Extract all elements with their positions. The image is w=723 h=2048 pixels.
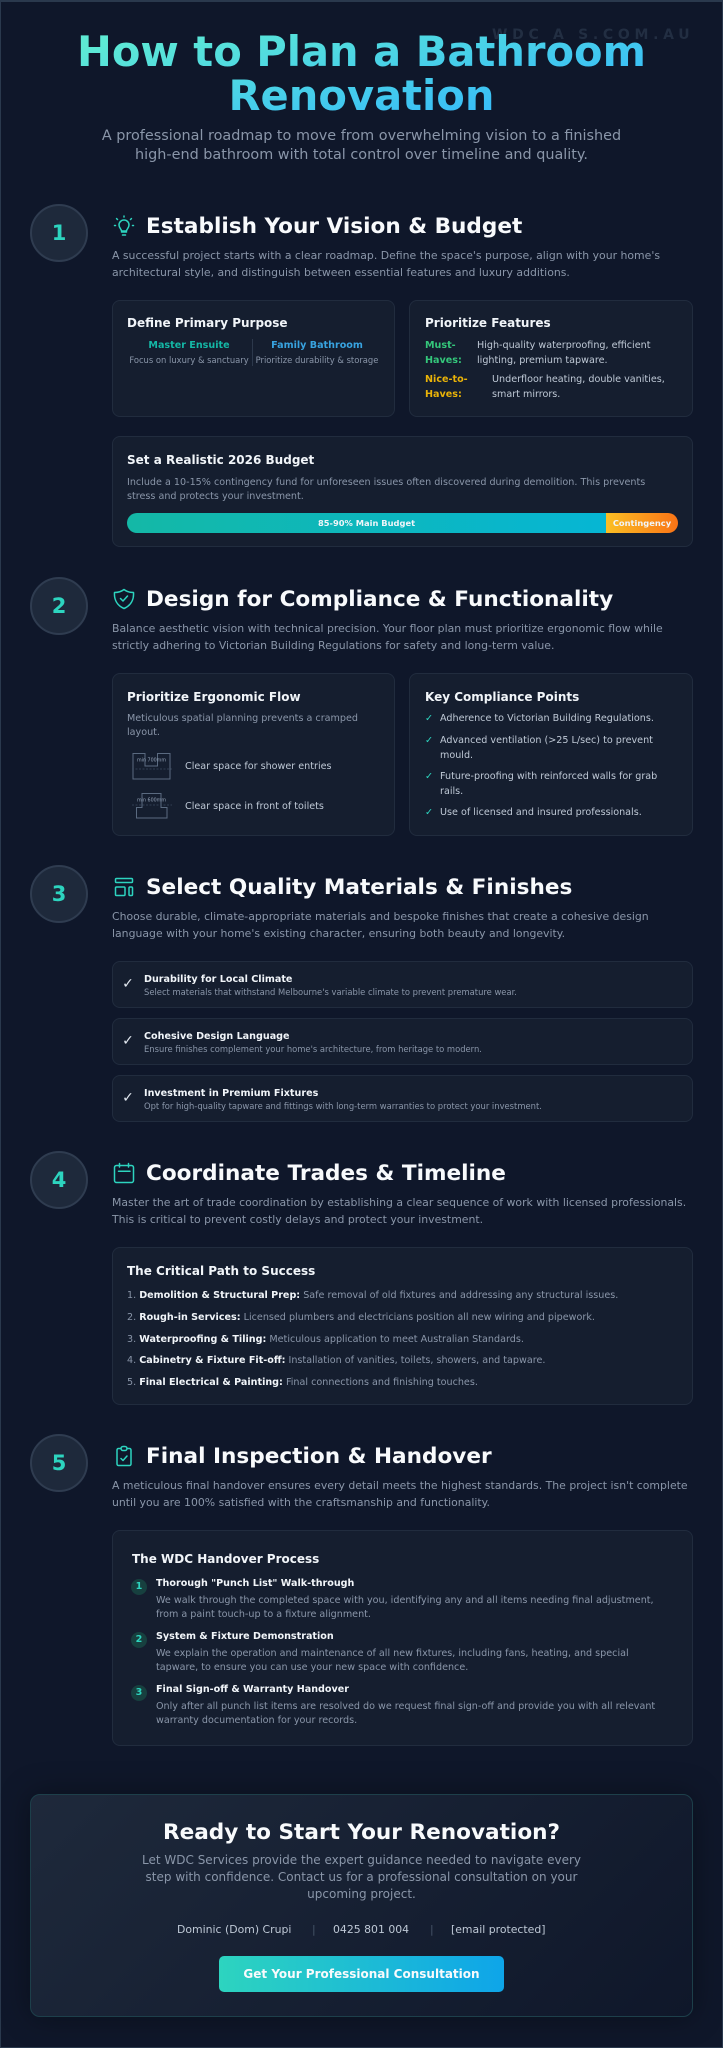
compliance item 2 <box>425 735 653 761</box>
button <box>219 1956 504 1992</box>
subtitle <box>102 128 621 163</box>
step number 3: 3 <box>52 882 66 906</box>
path step 1: 1. Demolition & Structural Prep: Safe removal of old fixtures and addressing any structural issues. <box>127 1290 618 1301</box>
must-haves <box>425 340 650 366</box>
badge: 2 <box>136 1634 142 1644</box>
panel heading: Prioritize Ergonomic Flow <box>127 690 301 704</box>
watermark: WDC A S.COM.AU <box>492 27 694 43</box>
icon: shield <box>114 588 134 610</box>
description: until you are 100% satisfied with the craftsmanship and functionality. <box>112 1496 490 1508</box>
step number 5 <box>30 1434 88 1492</box>
panel: budget <box>112 436 693 547</box>
check icon: ✓ <box>122 1033 134 1049</box>
item title: Durability for Local Climate <box>144 974 292 984</box>
compliance item 1: ✓ <box>425 713 433 724</box>
subtitle: high-end bathroom with total control over timeline and quality. <box>135 147 588 163</box>
heading: Establish Your Vision & Budget <box>146 214 522 238</box>
item text: Ensure finishes complement your home's architecture, from heritage to modern. <box>144 1044 482 1054</box>
main budget segment: 85-90% Main Budget <box>318 518 415 528</box>
icon: layout <box>114 878 134 896</box>
panel heading: The WDC Handover Process <box>132 1552 319 1566</box>
step number 1: 1 <box>52 221 66 245</box>
panel: key compliance points <box>409 673 693 836</box>
step text: We walk through the completed space with you, identifying any and all items needing final adjustment, <box>156 1595 654 1606</box>
label: toilet: Clear space in front of toilets <box>185 800 324 812</box>
heading: Select Quality Materials & Finishes <box>146 875 572 900</box>
step number 5: 5 <box>52 1451 66 1475</box>
path step 4: 4. Cabinetry & Fixture Fit-off: Installation of vanities, toilets, showers, and tapware. <box>127 1355 545 1366</box>
panel text <box>127 713 358 738</box>
panel: premium fixtures <box>112 1075 693 1122</box>
badge <box>131 1632 147 1648</box>
description: architectural style, and distinguish between essential features and luxury additions. <box>112 266 570 278</box>
step text <box>156 1648 629 1673</box>
contact name: Dominic (Dom) Crupi <box>177 1923 291 1936</box>
contact details: | <box>312 1923 316 1936</box>
step text <box>156 1595 654 1620</box>
section 4: trades <box>30 1151 693 1405</box>
step text: warranty documentation for your records. <box>156 1715 357 1726</box>
handover step 3 <box>131 1684 655 1726</box>
icon: shower clearance diagram <box>132 753 172 780</box>
contact phone: 0425 801 004 <box>333 1923 409 1936</box>
item text: Select materials that withstand Melbourne's variable climate to prevent premature wear. <box>144 987 517 997</box>
icon: lightbulb <box>114 215 134 236</box>
path step 2: 2. Rough-in Services: Licensed plumbers and electricians position all new wiring and pipework. <box>127 1312 595 1323</box>
nice-to-haves: smart mirrors. <box>492 389 560 400</box>
contingency segment <box>606 513 678 533</box>
step text: We explain the operation and maintenance of all new fixtures, including fans, heating, and special <box>156 1648 629 1659</box>
nice-to-haves: Nice-to- <box>425 374 468 385</box>
description: language with your home's existing character, ensuring both beauty and longevity. <box>112 927 565 940</box>
heading: Design for Compliance & Functionality <box>146 586 613 612</box>
panel heading: Key Compliance Points <box>425 690 579 704</box>
label: shower: Clear space for shower entries <box>185 760 332 772</box>
step number 2: 2 <box>52 594 66 618</box>
panel text: layout. <box>127 727 160 738</box>
step number 3 <box>30 865 88 923</box>
compliance item 4: Use of licensed and insured professionals. <box>440 807 642 818</box>
compliance item 2: ✓ <box>425 735 433 746</box>
budget text <box>127 476 645 502</box>
description <box>112 622 663 652</box>
step title: Final Sign-off & Warranty Handover <box>156 1684 349 1695</box>
must-haves: High-quality waterproofing, efficient <box>477 340 650 351</box>
panel heading: Prioritize Features <box>425 316 551 330</box>
contact details <box>177 1922 547 1938</box>
nice-to-haves <box>425 374 665 400</box>
description: strictly adhering to Victorian Building Regulations for safety and long-term value. <box>112 638 554 652</box>
step text: Only after all punch list items are resolved do we request final sign-off and provide you with all relevant <box>156 1701 655 1712</box>
option: family bathroom: Prioritize durability & storage <box>256 355 378 365</box>
budget text: Include a 10-15% contingency fund for unforeseen issues often discovered during demolition. This prevents <box>127 476 645 488</box>
description: Master the art of trade coordination by establishing a clear sequence of work with licensed professionals. <box>112 1196 686 1208</box>
option: master ensuite: Master Ensuite <box>148 340 230 351</box>
cta heading: Ready to Start Your Renovation? <box>163 1820 560 1844</box>
compliance item 1: Adherence to Victorian Building Regulations. <box>440 713 654 724</box>
item title: Cohesive Design Language <box>144 1030 290 1042</box>
compliance item 2: Advanced ventilation (>25 L/sec) to prevent <box>440 735 653 746</box>
option: family bathroom <box>256 340 378 365</box>
description: A meticulous final handover ensures every detail meets the highest standards. The project isn't complete <box>112 1478 688 1492</box>
panel heading: The Critical Path to Success <box>127 1264 315 1278</box>
compliance item 4: ✓ <box>425 807 433 818</box>
panel: handover process <box>112 1530 693 1746</box>
item text: Opt for high-quality tapware and fittings with long-term warranties to protect your investment. <box>144 1101 542 1111</box>
section 2: compliance <box>30 577 693 836</box>
step text: tapware, to ensure you can use your new space with confidence. <box>156 1662 468 1673</box>
description: This is critical to prevent costly delays and protect your investment. <box>112 1212 483 1226</box>
title: How to Plan a Bathroom <box>77 27 646 76</box>
description: A successful project starts with a clear roadmap. Define the space's purpose, align with your home's <box>112 248 660 262</box>
icon: clipboard check <box>116 1446 132 1466</box>
compliance item 3: rails. <box>440 786 463 797</box>
description: Balance aesthetic vision with technical precision. Your floor plan must prioritize ergonomic flow while <box>112 622 663 634</box>
main budget segment <box>127 513 606 533</box>
option: family bathroom: Family Bathroom <box>271 340 363 351</box>
handover step 2 <box>131 1631 629 1673</box>
description <box>112 910 649 940</box>
icon: calendar <box>114 1162 134 1184</box>
heading: Coordinate Trades & Timeline <box>146 1160 506 1186</box>
step number 4 <box>30 1151 88 1209</box>
step text: from a paint touch-up to a fixture alignment. <box>156 1609 371 1620</box>
panel: ergonomic flow <box>112 673 395 836</box>
panel heading: Set a Realistic 2026 Budget <box>127 452 314 466</box>
icon: shower clearance diagram: min 700mm <box>137 758 166 764</box>
step number 1 <box>30 204 88 262</box>
nice-to-haves: Underfloor heating, double vanities, <box>492 374 665 385</box>
icon: toilet clearance diagram: min 600mm <box>137 798 166 804</box>
cta text: Let WDC Services provide the expert guidance needed to navigate every <box>142 1852 581 1866</box>
section 5: handover <box>30 1434 693 1746</box>
subtitle: A professional roadmap to move from overwhelming vision to a finished <box>102 128 621 144</box>
panel: define primary purpose <box>112 300 395 417</box>
description <box>112 1478 688 1508</box>
budget text: stress and protects your investment. <box>127 491 304 502</box>
item title: Investment in Premium Fixtures <box>144 1088 318 1098</box>
panel heading: Define Primary Purpose <box>127 316 288 330</box>
compliance item 3: ✓ <box>425 771 433 782</box>
check icon: ✓ <box>122 976 134 992</box>
cta text: upcoming project. <box>307 1886 416 1900</box>
badge <box>131 1684 147 1700</box>
must-haves: Haves: <box>425 355 462 366</box>
must-haves: lighting, premium tapware. <box>477 355 608 366</box>
badge: 3 <box>136 1686 142 1698</box>
panel: critical path <box>112 1247 693 1405</box>
step number 2 <box>30 577 88 635</box>
title <box>30 30 693 118</box>
description <box>112 248 660 278</box>
contingency segment: Contingency <box>613 518 671 528</box>
must-haves: Must- <box>425 340 456 351</box>
step number 4: 4 <box>52 1168 66 1192</box>
panel text: Meticulous spatial planning prevents a cramped <box>127 713 358 724</box>
button: Get Your Professional Consultation <box>243 1967 480 1981</box>
section 1: vision and budget <box>30 204 693 547</box>
panel: cohesive design <box>112 1018 693 1065</box>
option: master ensuite <box>129 340 249 365</box>
description <box>112 1196 686 1226</box>
cta text: step with confidence. Contact us for a professional consultation on your <box>146 1870 577 1884</box>
step title: System & Fixture Demonstration <box>156 1631 334 1642</box>
description: Choose durable, climate-appropriate materials and bespoke finishes that create a cohesive design <box>112 910 649 923</box>
contact details: | <box>430 1923 434 1936</box>
panel: call to action <box>30 1794 693 2017</box>
compliance item 2: mould. <box>440 750 473 761</box>
cta text <box>31 1852 692 1902</box>
compliance item 3 <box>425 771 657 797</box>
badge: 1 <box>136 1580 142 1592</box>
step title: Thorough "Punch List" Walk-through <box>156 1578 354 1589</box>
title: Renovation <box>229 71 494 120</box>
step text <box>156 1701 655 1726</box>
section 3: materials <box>30 865 693 1122</box>
heading: Final Inspection & Handover <box>146 1444 492 1468</box>
compliance item 3: Future-proofing with reinforced walls for grab <box>440 771 657 782</box>
budget bar <box>127 513 678 533</box>
icon: toilet clearance diagram <box>132 793 172 818</box>
panel: durability <box>112 961 693 1008</box>
check icon: ✓ <box>122 1090 134 1106</box>
panel: prioritize features <box>409 300 693 417</box>
handover step 1 <box>131 1578 654 1620</box>
contact email: [email protected] <box>451 1923 546 1936</box>
path step 5: 5. Final Electrical & Painting: Final connections and finishing touches. <box>127 1377 478 1388</box>
option: master ensuite: Focus on luxury & sanctuary <box>129 355 249 365</box>
badge <box>131 1578 147 1594</box>
nice-to-haves: Haves: <box>425 389 462 400</box>
path step 3: 3. Waterproofing & Tiling: Meticulous application to meet Australian Standards. <box>127 1334 524 1345</box>
